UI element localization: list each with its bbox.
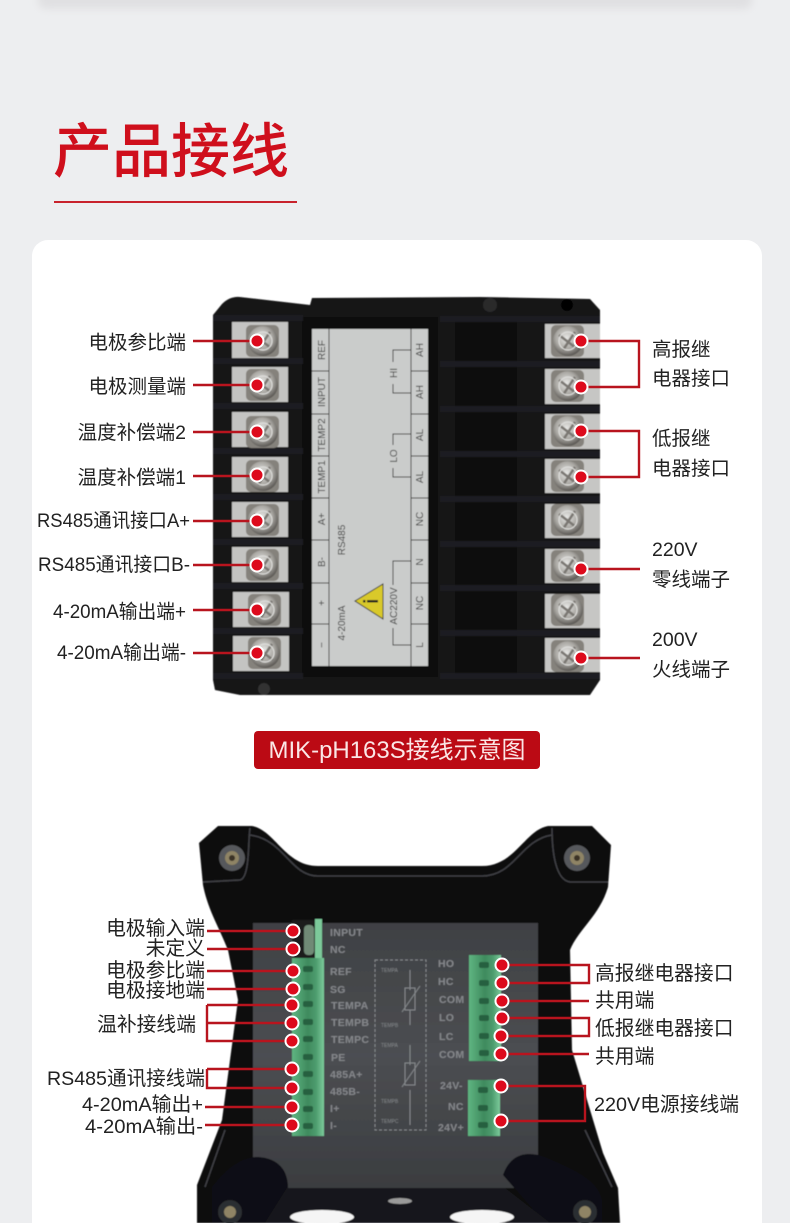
wiring label plate	[312, 329, 428, 666]
callouts: left side of enclosure: 电极参比端	[106, 960, 205, 982]
callouts: left side of enclosure: RS485通讯接线端	[47, 1068, 205, 1090]
wiring label plate: AC220V	[389, 587, 400, 625]
callouts: left side of enclosure	[47, 918, 300, 1138]
callouts: left side of rear view: RS485通讯接口B-	[38, 554, 190, 576]
wiring label plate: −	[317, 642, 328, 648]
callouts: right side of rear view: 电器接口	[652, 458, 730, 480]
callouts: left side of enclosure: 未定义	[146, 938, 205, 960]
corner screw top right	[564, 845, 590, 871]
callouts: left side of enclosure: 4-20mA输出-	[85, 1116, 203, 1138]
wiring label plate: A+	[317, 513, 328, 525]
terminal ribs	[213, 315, 600, 679]
printed RTD diagram: TEMPC	[381, 1119, 399, 1125]
top shadow band	[38, 0, 752, 9]
printed right terminal names: COM	[439, 1049, 464, 1061]
corner screw bottom left	[218, 1200, 242, 1223]
callouts: right side of rear view: 火线端子	[652, 659, 730, 681]
wiring label plate: +	[317, 600, 328, 606]
printed left terminal names: INPUT	[330, 927, 363, 939]
corner screw bottom right	[573, 1200, 597, 1223]
printed left terminal names: TEMPA	[331, 1000, 369, 1012]
callouts: right side of rear view: 电器接口	[652, 368, 730, 390]
bottom posts	[212, 1154, 602, 1223]
wiring label plate: AL	[415, 428, 426, 441]
printed left terminal names: I-	[330, 1120, 337, 1132]
callouts: right side of rear view: 零线端子	[652, 569, 730, 591]
callouts: left side of rear view: 温度补偿端2	[78, 422, 186, 444]
printed RTD diagram	[375, 960, 426, 1130]
callouts: right side of rear view: 低报继	[652, 428, 711, 450]
left terminal plates	[232, 322, 289, 671]
callouts: right side of rear view: 200V	[652, 629, 698, 651]
callouts: right side of enclosure: 共用端	[595, 1046, 654, 1068]
callouts: left side of rear view: 电极测量端	[88, 376, 186, 398]
printed right terminal names: HO	[438, 958, 454, 970]
printed right terminal names: 24V-	[440, 1080, 463, 1092]
printed right terminal names: LC	[439, 1031, 454, 1043]
printed left terminal names: I+	[330, 1103, 340, 1115]
wiring label plate: N	[415, 558, 426, 566]
device: MIK-pH163S rear view	[213, 297, 600, 695]
wiring label plate: TEMP2	[317, 418, 328, 452]
printed RTD diagram: TEMPB	[381, 1099, 399, 1105]
callouts: left side of enclosure: 温补接线端	[97, 1014, 196, 1036]
title: 产品接线	[53, 119, 289, 185]
wiring label plate: L	[415, 642, 426, 648]
right green terminal block top	[469, 955, 501, 1061]
printed right terminal names: 24V+	[438, 1122, 464, 1134]
printed left terminal names: SG	[330, 984, 346, 996]
callouts: left side of enclosure: 电极接地端	[106, 980, 205, 1002]
wiring label plate: RS485	[337, 524, 348, 555]
callouts: left side of enclosure: 4-20mA输出+	[82, 1094, 203, 1116]
printed left terminal names: TEMPB	[331, 1017, 369, 1029]
printed right terminal names: LO	[439, 1012, 454, 1024]
device: open enclosure view	[197, 826, 620, 1223]
printed left terminal names: REF	[330, 966, 352, 978]
printed right terminal names: COM	[439, 994, 464, 1006]
callouts: right side of enclosure: 共用端	[595, 990, 654, 1012]
wiring label plate: NC	[415, 596, 426, 610]
callouts: right side of rear view: 220V	[652, 539, 698, 561]
callouts: right side of enclosure: 低报继电器接口	[595, 1018, 733, 1040]
right green terminal block bottom	[468, 1080, 500, 1136]
callouts: right side of rear view: 高报继	[652, 339, 711, 361]
printed left terminal names	[330, 927, 369, 1132]
callouts: left side of rear view: 温度补偿端1	[78, 467, 186, 489]
inner panel	[253, 923, 538, 1188]
printed left terminal names: 485B-	[330, 1086, 360, 1098]
left green terminal block	[292, 919, 324, 1136]
callouts: left side of rear view: 电极参比端	[88, 332, 186, 354]
wiring label plate: INPUT	[317, 377, 328, 407]
wiring label plate: B-	[317, 557, 328, 567]
printed RTD diagram: TEMPB	[381, 1023, 399, 1029]
wiring label plate: AL	[415, 470, 426, 483]
panel: wiring card	[32, 240, 762, 1223]
printed left terminal names: NC	[330, 944, 346, 956]
caption badge	[254, 731, 540, 769]
callouts: left side of enclosure: 电极输入端	[106, 918, 205, 940]
title underline	[54, 201, 297, 203]
printed RTD diagram: TEMPA	[381, 1043, 399, 1049]
right terminal plates	[545, 324, 600, 672]
wiring label plate: TEMP1	[317, 460, 328, 494]
enclosure rim lines	[203, 828, 612, 1187]
printed left terminal names: TEMPC	[331, 1034, 369, 1046]
corner screw top left	[219, 845, 245, 871]
printed right terminal names	[438, 958, 464, 1134]
printed right terminal names: NC	[448, 1101, 464, 1113]
callouts: left side of rear view	[37, 332, 264, 664]
icon: warning triangle	[355, 584, 383, 619]
callouts: left side of rear view: 4-20mA输出端+	[53, 601, 186, 623]
callouts: right side of enclosure: 高报继电器接口	[595, 963, 733, 985]
bottom plate with cable holes	[265, 1188, 550, 1223]
printed left terminal names: PE	[331, 1052, 346, 1064]
callouts: right side of rear view	[574, 334, 730, 681]
printed RTD diagram: TEMPA	[381, 968, 399, 974]
wiring label plate: AH	[415, 385, 426, 399]
callouts: right side of enclosure	[494, 958, 739, 1128]
wiring label plate: REF	[317, 340, 328, 360]
printed left terminal names: 485A+	[330, 1069, 363, 1081]
printed right terminal names: HC	[438, 976, 454, 988]
callouts: left side of rear view: 4-20mA输出端-	[57, 642, 186, 664]
caption badge: MIK-pH163S接线示意图	[268, 737, 526, 764]
callouts: right side of enclosure: 220V电源接线端	[594, 1094, 739, 1116]
wiring label plate: LO	[389, 449, 400, 463]
wiring label plate: HI	[389, 368, 400, 378]
wiring label plate: AH	[415, 343, 426, 357]
callouts: left side of rear view: RS485通讯接口A+	[37, 510, 190, 532]
wiring label plate: NC	[415, 512, 426, 526]
wiring label plate: 4-20mA	[337, 605, 348, 641]
